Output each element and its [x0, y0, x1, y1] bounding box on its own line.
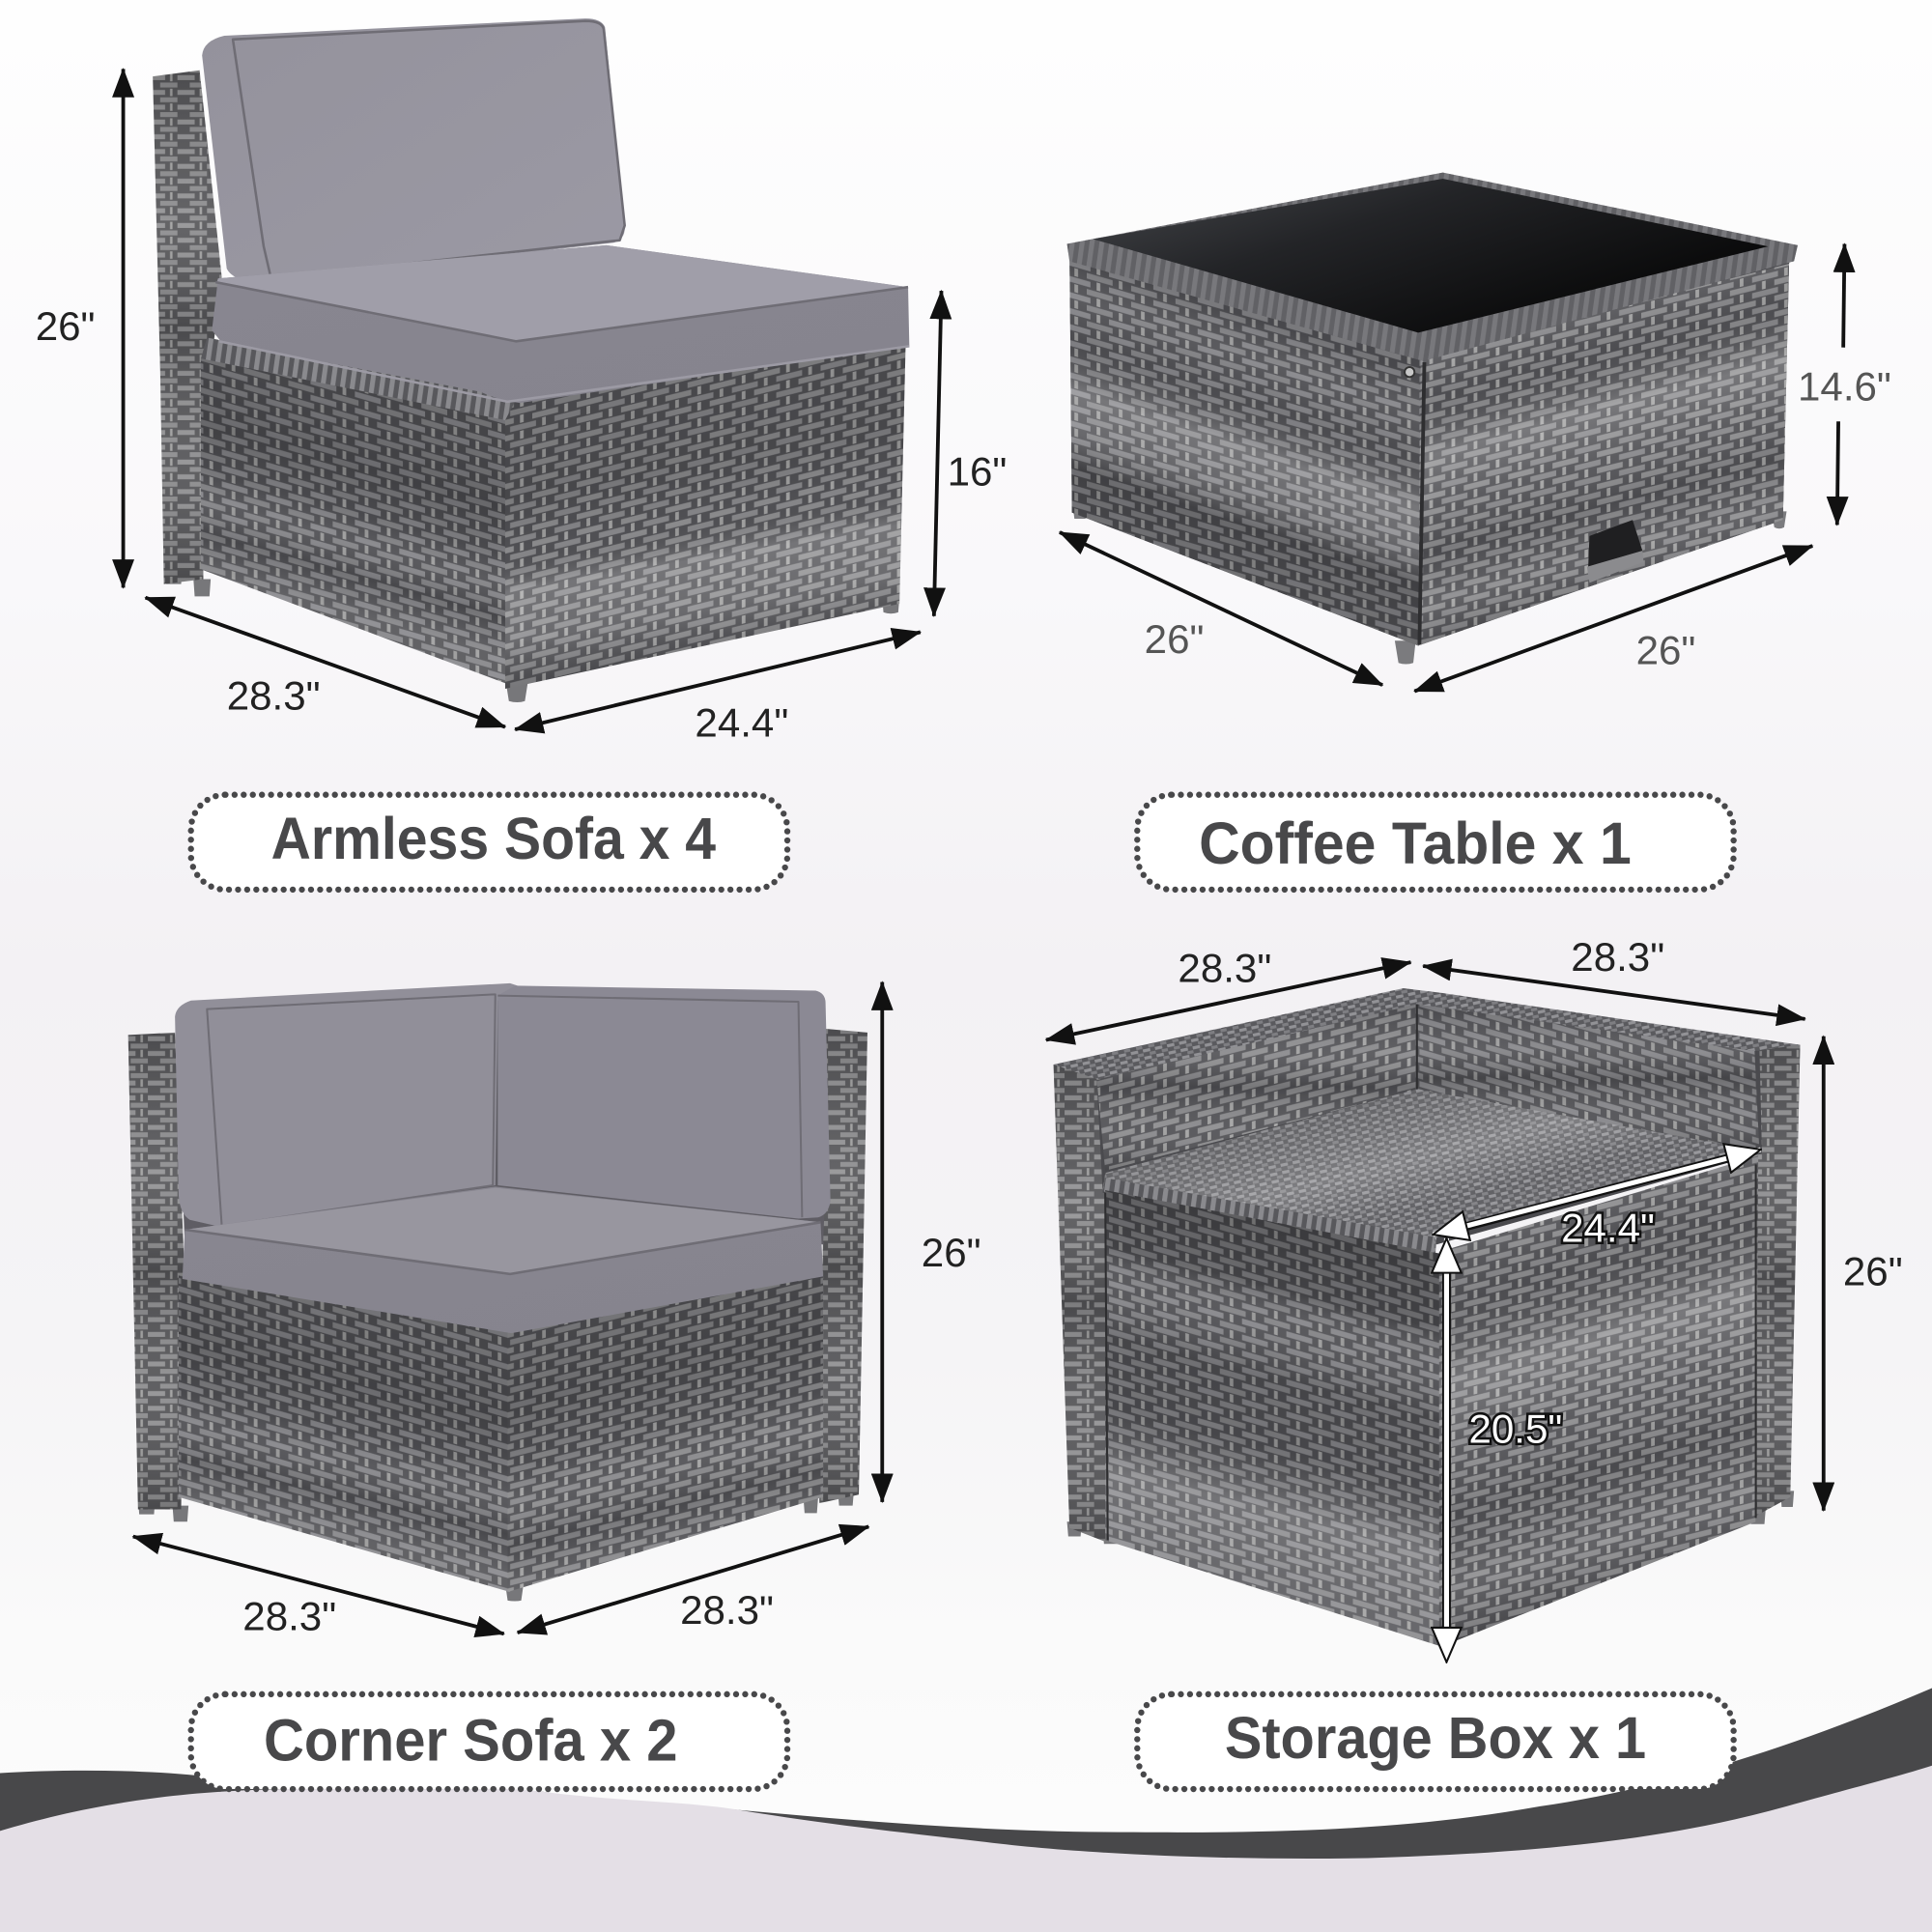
arrow: top right: [1423, 966, 1805, 1019]
corner left face: [179, 1275, 510, 1592]
label: 26: 26": [922, 1230, 981, 1275]
box panel seams: [1105, 1164, 1756, 1540]
panel: armless sofa: [36, 18, 1007, 746]
lid: [1103, 1090, 1761, 1254]
label: 28.3: 28.3": [1571, 934, 1664, 980]
label: 26: 26": [1145, 616, 1204, 662]
arrow: depth: [146, 598, 505, 727]
badge: Coffee Table x 1: [1137, 795, 1734, 890]
white arrow: seat width: [1433, 1150, 1761, 1235]
back cushion left: [175, 983, 518, 1227]
table right face: [1418, 264, 1789, 645]
badge: Storage Box x 1: [1137, 1694, 1734, 1789]
left arm wicker: [153, 71, 222, 584]
box feet: [1067, 1491, 1794, 1544]
badge: Corner Sofa x 2: [191, 1694, 787, 1789]
table left face: [1069, 252, 1423, 645]
arrow: seat height 16: [934, 291, 941, 616]
arrow: width: [515, 632, 921, 729]
white arrow: interior height: [1443, 1238, 1450, 1662]
badge: Storage Box x 1: Storage Box x 1: [1225, 1705, 1646, 1771]
table corner seam: [1419, 362, 1424, 644]
right arm: [819, 1029, 867, 1503]
label: 16: 16": [948, 449, 1007, 495]
label: 28.3: 28.3": [1178, 946, 1271, 991]
arrow: left side: [133, 1537, 504, 1634]
box right face: [1439, 1155, 1758, 1647]
label: 28.3: 28.3": [227, 673, 321, 719]
decorative dark wave: [0, 1688, 1932, 1932]
arrow: table width: [1414, 546, 1812, 692]
panel: coffee table: [1060, 173, 1891, 692]
box right post: [1749, 1045, 1801, 1518]
arrow: table depth: [1060, 532, 1382, 685]
label: 26: 26": [1843, 1248, 1903, 1293]
label: 28.3: 28.3": [242, 1594, 336, 1639]
lid front edge: [1103, 1178, 1435, 1253]
sofa left face: [201, 357, 510, 685]
table rim: [1067, 173, 1798, 361]
arrow: top left: [1046, 962, 1410, 1040]
sofa feet: [165, 567, 899, 702]
badge: Armless Sofa x 4: Armless Sofa x 4: [271, 806, 716, 871]
badge: Armless Sofa x 4: [191, 795, 787, 890]
arrows: height 14.6: [1837, 244, 1844, 525]
label: 14.6: 14.6": [1798, 364, 1891, 410]
label: 28.3: 28.3": [680, 1587, 774, 1633]
arrow: height 26: [1822, 1037, 1825, 1511]
badge: Corner Sofa x 2: Corner Sofa x 2: [264, 1708, 678, 1774]
decorative lavender wave: [0, 1766, 1932, 1932]
panel: corner sofa: [128, 982, 981, 1638]
panel: storage box: [1046, 934, 1903, 1662]
left arm: [128, 1033, 185, 1509]
label: 26: 26": [1636, 627, 1695, 672]
cushion shadow underlay: [183, 991, 826, 1244]
badge: Coffee Table x 1: Coffee Table x 1: [1199, 810, 1632, 876]
table feet: [1072, 499, 1786, 665]
corner right face: [508, 1273, 823, 1592]
seat cushion: [183, 1186, 823, 1333]
label: 26: 26": [36, 303, 95, 349]
drawer handle slot: [1587, 520, 1644, 582]
label: 24.4: 24.4": [1561, 1206, 1655, 1251]
arrow: sofa height 26: [122, 69, 125, 587]
sofa top rim: [201, 337, 518, 420]
corner feet: [138, 1491, 854, 1602]
glass top: [1093, 179, 1768, 332]
label: 20.5: 20.5": [1468, 1406, 1562, 1452]
box left post: [1054, 1065, 1108, 1543]
box left face: [1105, 1190, 1444, 1647]
box corner seam: [1416, 1005, 1418, 1090]
screw: [1405, 367, 1414, 377]
back wall right: [1416, 1003, 1759, 1153]
table body underlay: [1069, 175, 1794, 645]
arrow: right side: [518, 1526, 868, 1633]
label: 24.4: 24.4": [695, 700, 788, 746]
back cushion: [202, 18, 625, 282]
box interior underlay: [1096, 1003, 1762, 1244]
back cushion right: [497, 985, 831, 1218]
arrow: height 26: [881, 982, 884, 1502]
seat cushion: [212, 245, 909, 403]
back wall left: [1096, 1003, 1418, 1171]
box top rim: [1054, 988, 1801, 1079]
sofa right face: [505, 345, 906, 689]
